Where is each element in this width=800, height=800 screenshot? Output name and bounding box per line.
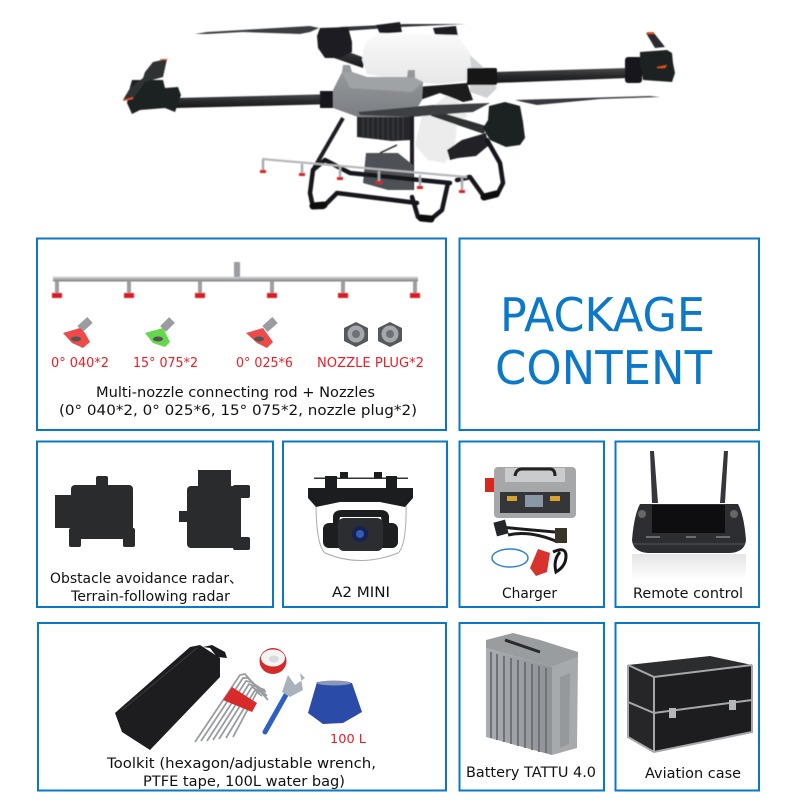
- propeller: rear right: [646, 33, 665, 48]
- nozzle description: (0° 040*2, 0° 025*6, 15° 075*2, nozzle plug*2): [59, 403, 417, 419]
- icon: remote controller: [632, 451, 746, 580]
- toolkit caption: [106, 756, 376, 790]
- nozzle description: [59, 385, 417, 419]
- nozzle labels: 15° 075*2: [133, 356, 198, 371]
- radar caption: Obstacle avoidance radar、: [50, 571, 243, 587]
- radar caption: Terrain-following radar: [70, 589, 230, 605]
- drone inner frame: [413, 83, 473, 102]
- panel: battery: [460, 623, 604, 790]
- arm: front right: [431, 110, 486, 134]
- toolkit caption: PTFE tape, 100L water bag): [143, 774, 345, 790]
- battery fins: [363, 117, 403, 140]
- label: Aviation case: [645, 766, 741, 782]
- icon: usb cable: [492, 549, 528, 567]
- propeller: front right outer: [515, 96, 660, 105]
- nozzle: red 040: [63, 320, 90, 348]
- nozzle labels: NOZZLE PLUG*2: [317, 356, 424, 371]
- heading: [495, 288, 713, 395]
- icon: gimbal camera: [308, 472, 413, 560]
- boom rod: [262, 159, 467, 177]
- panel: charger: [460, 442, 604, 607]
- icon: adjustable wrench: [265, 673, 305, 732]
- motor: front left: [127, 80, 181, 114]
- icon: power cord: [553, 550, 566, 572]
- label: Remote control: [633, 586, 743, 602]
- nozzle labels: 0° 025*6: [236, 356, 293, 371]
- grey fuselage: [333, 65, 423, 117]
- arm: rear left: [334, 48, 365, 68]
- icon: PTFE tape: [260, 648, 286, 674]
- tank right shoulder: [470, 55, 497, 98]
- drone photo: [123, 22, 675, 220]
- nozzle description: Multi-nozzle connecting rod + Nozzles: [96, 385, 375, 401]
- label: Charger: [502, 586, 557, 602]
- clamp: motor rear right: [625, 57, 642, 83]
- drone leg: left: [313, 118, 343, 170]
- panel: radar: [37, 442, 273, 607]
- icon: hex keys: [195, 674, 268, 742]
- toolkit caption: Toolkit (hexagon/adjustable wrench,: [106, 756, 376, 772]
- heading: CONTENT: [495, 341, 713, 395]
- panel: toolkit: [38, 623, 446, 790]
- pump hose: [380, 145, 397, 153]
- icon: charging cables: [493, 520, 567, 543]
- propeller: front right inner: [358, 103, 490, 117]
- label: A2 MINI: [332, 585, 390, 601]
- label: Battery TATTU 4.0: [466, 765, 596, 781]
- arm clamp: rear right: [467, 68, 497, 85]
- pump: [363, 153, 413, 190]
- arm: rear right: [495, 68, 628, 83]
- motors: top centre: [376, 22, 458, 37]
- propeller tip: [647, 32, 654, 34]
- clamp: arm body: [320, 91, 334, 108]
- motor: rear right: [640, 50, 675, 82]
- battery block: [357, 115, 412, 141]
- motor: front right: [483, 102, 525, 147]
- lower tank: [415, 95, 468, 163]
- icon: terrain radar: [179, 470, 250, 550]
- icon: tool bag: [115, 645, 227, 750]
- skid foam: [313, 194, 496, 219]
- drone leg: centre: [410, 116, 414, 190]
- icon: power plug: [530, 549, 550, 576]
- motor: rear left: [317, 27, 352, 58]
- arm: front left: [176, 94, 336, 108]
- boom nozzles: [260, 160, 465, 193]
- heading: PACKAGE: [500, 288, 705, 342]
- nozzle plugs: [344, 322, 402, 347]
- radar caption: [50, 571, 243, 605]
- icon: charger unit: [485, 467, 576, 518]
- motor accent: [657, 65, 667, 68]
- nozzle: green 075: [145, 320, 172, 347]
- fuselage upper panel: [342, 72, 423, 92]
- centrifugal nozzle assembly: [447, 133, 488, 160]
- panel: aviation case: [616, 623, 759, 790]
- nozzle labels: [51, 356, 424, 371]
- propeller: rear centre: [340, 24, 466, 31]
- panel: A2 MINI: [283, 442, 447, 607]
- icon: aviation case: [628, 656, 752, 752]
- spray tank: [362, 33, 472, 84]
- icon: battery: [486, 633, 578, 755]
- propeller tips: [123, 59, 168, 101]
- bag capacity label: 100 L: [330, 732, 366, 746]
- icon: obstacle radar: [55, 476, 135, 547]
- nozzle: red 025: [246, 320, 275, 348]
- propeller: rear left: [195, 26, 319, 34]
- panel: remote control: [616, 442, 759, 607]
- connecting rod: [52, 262, 420, 298]
- nozzle labels: 0° 040*2: [51, 356, 109, 371]
- icon: water bag: [308, 680, 362, 724]
- panel: nozzles: [37, 238, 446, 430]
- landing gear: [310, 140, 503, 220]
- propeller: front left: [123, 59, 167, 100]
- panel: package content title: [460, 238, 759, 430]
